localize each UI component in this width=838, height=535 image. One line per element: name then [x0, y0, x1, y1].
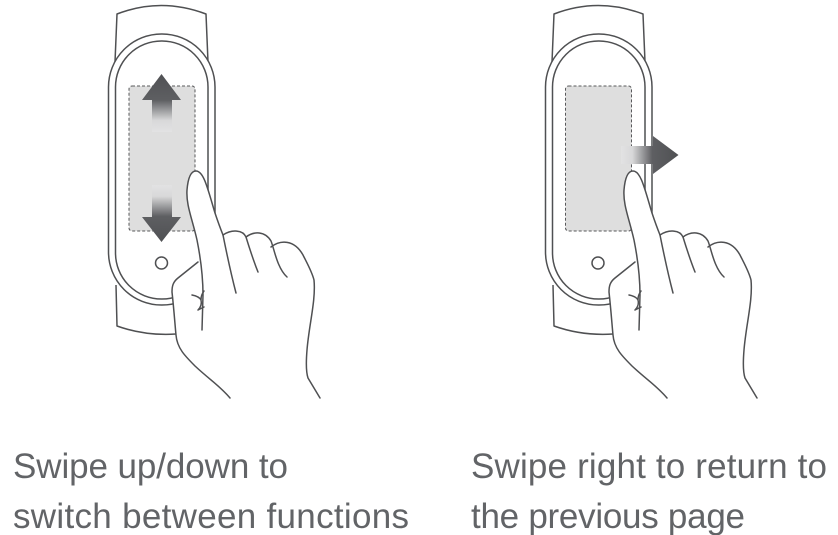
arrow: swipe down [142, 185, 181, 242]
caption: swipe right: Swipe right to return to [471, 447, 827, 486]
caption: swipe right [471, 447, 827, 535]
arrow: swipe up [142, 74, 181, 132]
caption: swipe up/down: Swipe up/down to [13, 447, 288, 486]
caption: swipe up/down: switch between functions [13, 497, 409, 535]
icon: fitness band [546, 6, 652, 334]
caption: swipe right: the previous page [471, 497, 745, 535]
panel: swipe right illustration [546, 6, 757, 398]
icon: fitness band [108, 6, 215, 334]
caption: swipe up/down [13, 447, 409, 535]
icon: hand [172, 171, 320, 398]
arrow: swipe right [621, 136, 678, 174]
panel: swipe up/down illustration [108, 6, 320, 398]
icon: hand [609, 171, 757, 398]
